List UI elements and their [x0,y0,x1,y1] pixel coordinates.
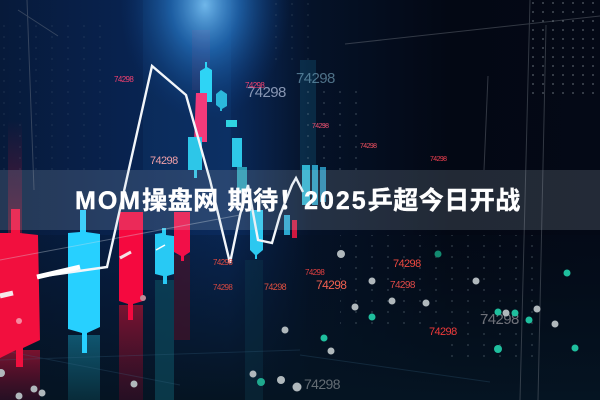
candlesticks [0,62,326,367]
number labels: 74298 [429,326,457,338]
number labels: 74298 [316,278,347,292]
number labels: 74298 [264,282,287,292]
candle: red [119,212,143,320]
candle: hexagon [216,90,227,111]
candle: lower cyan [188,137,202,178]
number labels: 74298 [305,268,325,277]
number labels: 74298 [150,155,178,167]
number labels: 74298 [247,84,286,101]
candle: tall right [232,138,242,167]
candle: top cyan [200,62,212,102]
number labels [114,70,519,392]
number labels: 74298 [430,156,447,163]
title band [0,170,600,230]
number labels: 74298 [304,376,341,392]
candle: large red [0,209,40,367]
number labels: 74298 [480,311,519,328]
title band: MOM操盘网 期待！2025乒超今日开战 [75,187,521,215]
number labels: 74298 [390,280,416,291]
number labels: 74298 [360,143,377,150]
number labels: 74298 [245,81,265,90]
candle: red small [174,212,190,261]
candle: below band [250,210,263,259]
number labels: 74298 [296,70,335,87]
number labels: 74298 [312,123,329,130]
number labels: 74298 [213,258,233,267]
number labels: 74298 [393,258,421,270]
candle: tiny cyan [226,120,237,127]
candle: pink [194,93,207,142]
candle: large cyan [68,210,100,353]
white trend line [37,66,303,277]
candle: cyan small [155,228,174,284]
number labels: 74298 [213,283,233,292]
number labels: 74298 [114,75,134,84]
glowing dots [0,250,558,400]
